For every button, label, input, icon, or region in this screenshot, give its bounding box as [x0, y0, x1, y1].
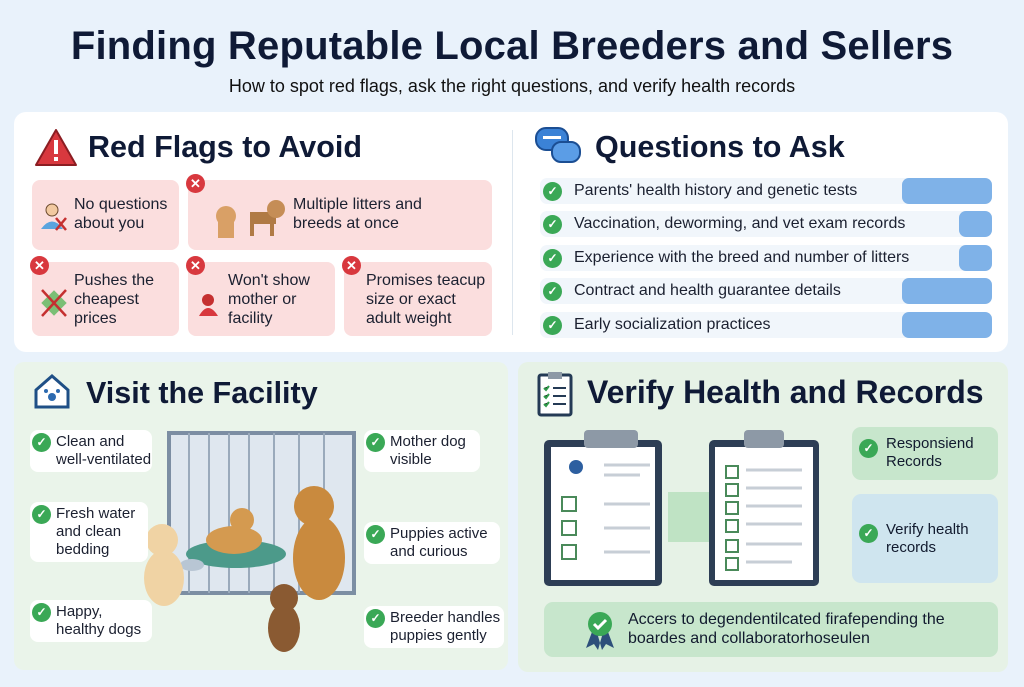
tip: happy — [30, 600, 152, 642]
callout: responsiend records — [852, 427, 998, 480]
item: teacup: ✕ — [346, 258, 357, 273]
tip: mother: Mother dog — [390, 433, 466, 450]
tip: puppies — [364, 522, 500, 564]
tip: water — [30, 502, 148, 562]
question list: ✓ — [547, 284, 558, 298]
tip: water: ✓ — [36, 507, 47, 521]
panel: top card — [14, 112, 1008, 352]
item: won't show mother: ✕ — [190, 258, 201, 273]
tip: happy: Happy, — [56, 603, 102, 620]
item: won't show mother: Won't show — [228, 272, 310, 289]
heading: Verify Health and Records — [587, 374, 984, 410]
question list: ✓ — [547, 251, 558, 265]
callout: verify health — [852, 494, 998, 583]
panel: questions — [535, 127, 992, 338]
panel: verify health — [518, 362, 1008, 672]
item: teacup: size or exact — [366, 291, 456, 308]
tip: puppies: ✓ — [370, 527, 381, 541]
tip: mother: ✓ — [370, 435, 381, 449]
item: multiple litters: Multiple litters and — [293, 196, 422, 213]
callout: verify health: Verify health — [886, 521, 969, 538]
tip: happy: healthy dogs — [56, 621, 141, 638]
question list: Early socialization practices — [574, 316, 771, 333]
callout: responsiend records: Responsiend — [886, 435, 974, 452]
question list: Experience with the breed and number of litters — [574, 249, 909, 266]
tip: water: bedding — [56, 541, 109, 558]
item: won't show mother: facility — [228, 310, 272, 327]
tip: breeder — [364, 606, 504, 648]
footer note — [544, 602, 998, 657]
item: multiple litters: breeds at once — [293, 215, 399, 232]
tip: happy: ✓ — [36, 605, 47, 619]
item: cheapest: ✕ — [34, 258, 45, 273]
item: teacup: Promises teacup — [366, 272, 485, 289]
footer note: Accers to degendentilcated firafepending the — [628, 611, 945, 628]
tip: water: and clean — [56, 523, 121, 540]
item: multiple litters — [188, 180, 492, 250]
callout: verify health: records — [886, 539, 936, 556]
tip: breeder: Breeder handles — [390, 609, 500, 626]
tip: mother: visible — [390, 451, 432, 468]
tip: puppies: Puppies active — [390, 525, 488, 542]
tip: breeder: ✓ — [370, 611, 381, 625]
illustration: clipboards with arrow — [544, 430, 819, 586]
tip: breeder: puppies gently — [390, 627, 487, 644]
title: Finding Reputable Local Breeders and Sellers — [71, 24, 953, 68]
panel: visit the facility — [14, 362, 508, 670]
question list: ✓ — [547, 184, 558, 198]
item: teacup: adult weight — [366, 310, 451, 327]
callout: responsiend records: ✓ — [863, 441, 874, 455]
panel: red flags — [30, 129, 492, 336]
tip: clean: Clean and — [56, 433, 124, 450]
illustration: cage with dogs — [144, 431, 356, 652]
item: teacup — [344, 262, 492, 336]
icon: clipboard — [538, 372, 572, 416]
heading: Red Flags to Avoid — [88, 130, 362, 164]
question list: Contract and health guarantee details — [574, 282, 841, 299]
item: no questions: No questions — [74, 196, 167, 213]
icon: warning — [35, 129, 77, 166]
item: cheapest: prices — [74, 310, 117, 327]
callout: responsiend records: Records — [886, 453, 942, 470]
item: multiple litters: ✕ — [190, 176, 201, 191]
question list: ✓ — [547, 318, 558, 332]
question list: ✓ — [547, 217, 558, 231]
item: cheapest: cheapest — [74, 291, 139, 308]
icon: badge — [586, 612, 614, 650]
item: no questions: about you — [74, 215, 144, 232]
tip: mother — [364, 430, 480, 472]
item: won't show mother — [188, 262, 335, 336]
question list: Vaccination, deworming, and vet exam records — [574, 215, 905, 232]
icon: house — [34, 374, 70, 408]
item: cheapest — [32, 262, 179, 336]
question list: Parents' health history and genetic tests — [574, 182, 857, 199]
item: no questions — [32, 180, 179, 250]
item: won't show mother: mother or — [228, 291, 296, 308]
tip: water: Fresh water — [56, 505, 135, 522]
footer note: boardes and collaboratorhoseulen — [628, 630, 870, 647]
subtitle: How to spot red flags, ask the right questions, and verify health records — [229, 76, 795, 96]
item: cheapest: Pushes the — [74, 272, 154, 289]
heading: Questions to Ask — [595, 130, 845, 164]
tip: puppies: and curious — [390, 543, 468, 560]
tip: clean: well-ventilated — [56, 451, 151, 468]
question list — [540, 178, 992, 338]
callout: verify health: ✓ — [863, 526, 874, 540]
tip: clean: ✓ — [36, 435, 47, 449]
heading: Visit the Facility — [86, 376, 318, 410]
icon: chat bubbles — [535, 127, 581, 163]
tip: clean — [30, 430, 152, 472]
